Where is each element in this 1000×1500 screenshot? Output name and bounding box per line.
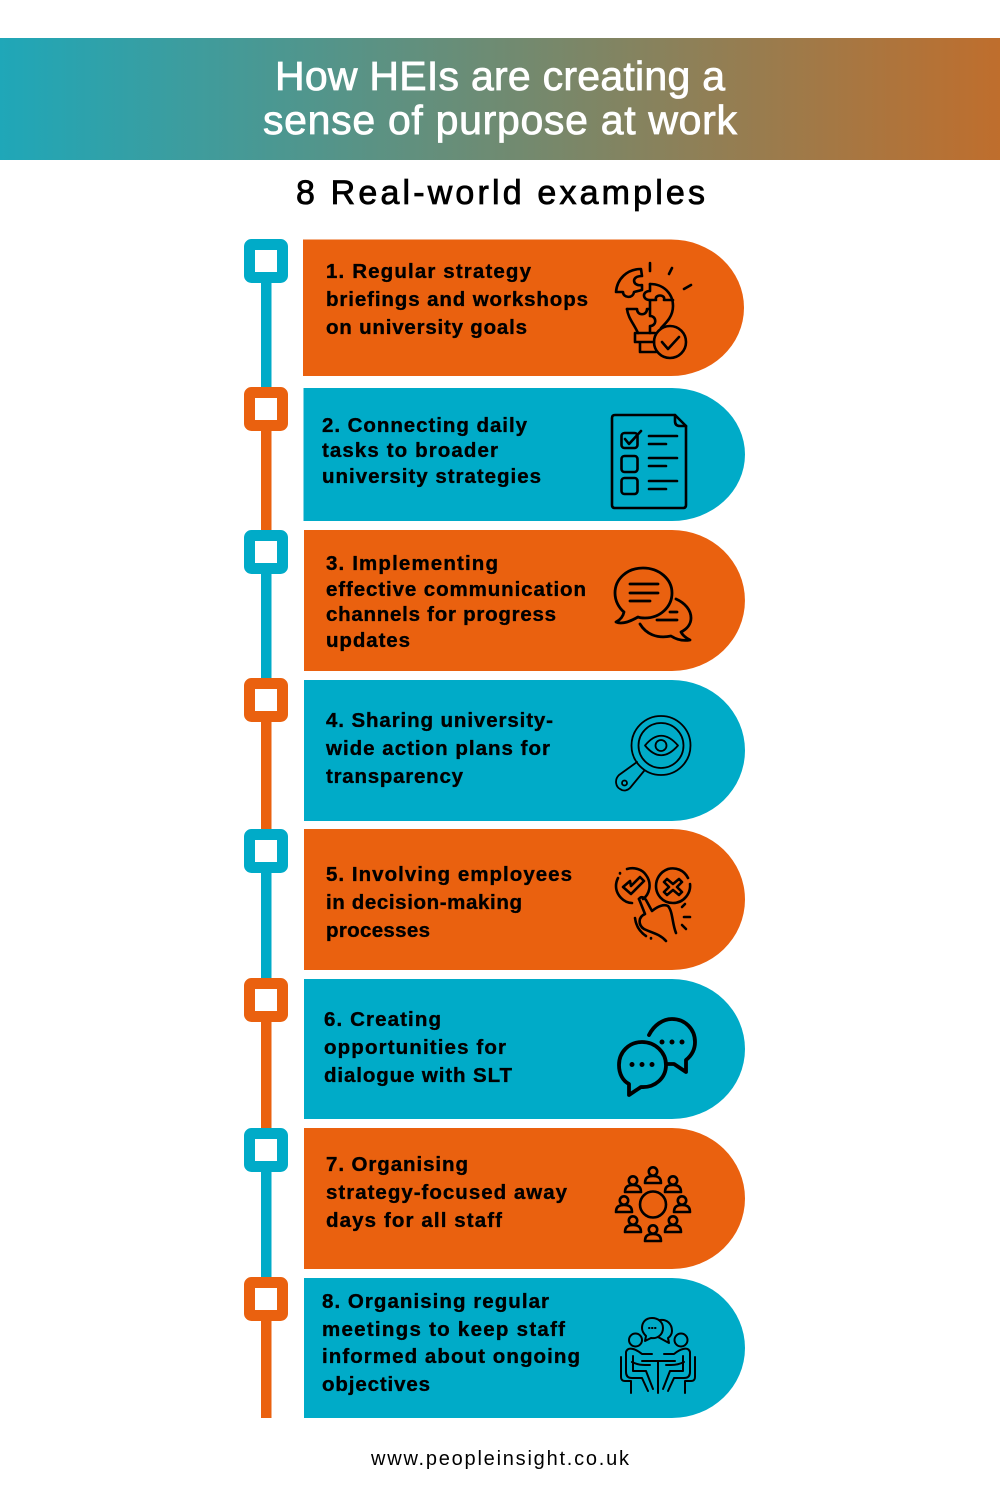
text 5 bbox=[326, 863, 572, 942]
panel 5 bbox=[304, 829, 745, 970]
panel 8 bbox=[304, 1278, 745, 1418]
text 7: days for all staff bbox=[326, 1209, 502, 1232]
title: How HEIs are creating a bbox=[275, 53, 725, 99]
text 6: dialogue with SLT bbox=[324, 1064, 512, 1087]
text 6 bbox=[324, 1008, 512, 1087]
timeline bbox=[250, 244, 282, 1418]
footer url: www.peopleinsight.co.uk bbox=[370, 1448, 630, 1470]
panel 2 bbox=[304, 388, 745, 521]
text 7 bbox=[326, 1153, 568, 1232]
text 6: 6. Creating bbox=[324, 1008, 441, 1031]
text 8: meetings to keep staff bbox=[322, 1318, 565, 1341]
text 4 bbox=[325, 709, 553, 788]
text 5: processes bbox=[326, 919, 430, 942]
text 2: university strategies bbox=[322, 465, 541, 488]
title bbox=[263, 53, 738, 143]
text 5: in decision-making bbox=[326, 891, 522, 914]
panel 6 bbox=[304, 979, 745, 1119]
text 1: on university goals bbox=[326, 316, 527, 339]
text 8: objectives bbox=[322, 1373, 430, 1396]
text 2 bbox=[322, 414, 541, 488]
text 7: 7. Organising bbox=[326, 1153, 468, 1176]
text 6: opportunities for bbox=[324, 1036, 506, 1059]
icon: meeting at a table bbox=[621, 1318, 695, 1393]
text 1: 1. Regular strategy bbox=[326, 260, 532, 283]
icon: speech bubbles bbox=[615, 568, 691, 640]
icon: dialogue bubbles bbox=[619, 1019, 695, 1095]
subtitle: 8 Real-world examples bbox=[296, 174, 705, 212]
text 4: wide action plans for bbox=[325, 737, 550, 760]
header banner bbox=[0, 38, 1000, 160]
icon: magnifier with eye bbox=[616, 716, 690, 791]
icon: hand choosing tick or cross bbox=[616, 868, 690, 941]
panel 4 bbox=[304, 680, 745, 821]
text 3 bbox=[326, 552, 586, 652]
text 2: 2. Connecting daily bbox=[322, 414, 528, 437]
text 7: strategy-focused away bbox=[326, 1181, 568, 1204]
panel 3 bbox=[304, 530, 745, 671]
text 8 bbox=[322, 1290, 580, 1396]
icon: puzzle light bulb bbox=[616, 263, 691, 358]
text 3: 3. Implementing bbox=[326, 552, 498, 575]
icon: people around a table bbox=[616, 1167, 690, 1241]
panel 7 bbox=[304, 1128, 745, 1269]
text 8: 8. Organising regular bbox=[322, 1290, 549, 1313]
icon: checklist bbox=[612, 415, 686, 508]
panel 1 bbox=[303, 240, 744, 376]
text 3: channels for progress bbox=[326, 603, 556, 626]
text 4: transparency bbox=[326, 765, 464, 788]
text 2: tasks to broader bbox=[322, 439, 498, 462]
text 1 bbox=[326, 260, 588, 339]
text 1: briefings and workshops bbox=[326, 288, 588, 311]
text 5: 5. Involving employees bbox=[326, 863, 572, 886]
text 4: 4. Sharing university- bbox=[326, 709, 553, 732]
text 8: informed about ongoing bbox=[322, 1345, 580, 1368]
title: sense of purpose at work bbox=[263, 97, 738, 143]
text 3: effective communication bbox=[326, 578, 586, 601]
text 3: updates bbox=[326, 629, 410, 652]
